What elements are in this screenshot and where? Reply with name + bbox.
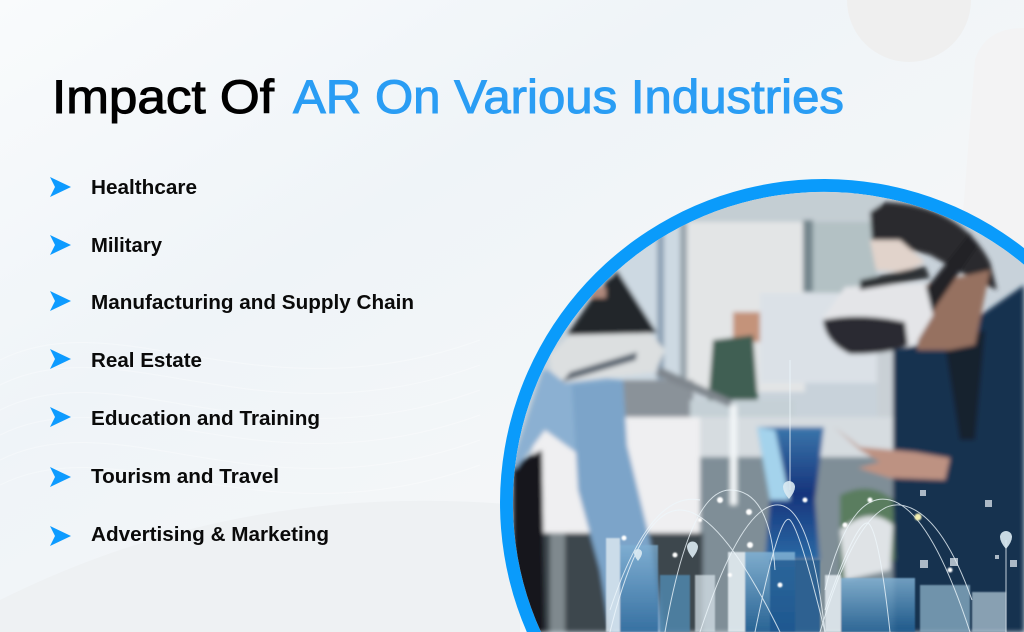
list item: Healthcare: Healthcare — [91, 176, 197, 199]
list item: Education and Training: Education and Training — [91, 407, 320, 430]
holographic city — [606, 360, 1017, 632]
title — [52, 70, 844, 123]
list: industries — [50, 176, 414, 546]
list item: Advertising & Marketing: Advertising & Marketing — [91, 523, 329, 546]
photo: people using VR headsets over a holographic city — [500, 179, 1024, 632]
list item: Manufacturing and Supply Chain: Manufacturing and Supply Chain — [91, 291, 414, 314]
title: AR On Various Industries — [293, 70, 844, 123]
photo ring — [500, 179, 1024, 632]
list item: Military — [50, 234, 163, 257]
title: Impact Of — [52, 70, 275, 123]
list item: Real Estate: Real Estate — [91, 349, 202, 372]
list item: Tourism and Travel: Tourism and Travel — [91, 465, 279, 488]
list item: Military: Military — [91, 234, 163, 257]
